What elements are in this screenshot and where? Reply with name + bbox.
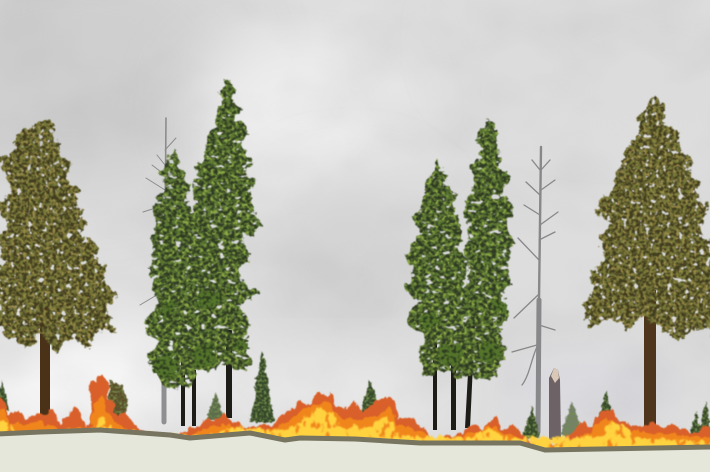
ground surface [0,430,710,472]
tree: left ponderosa pine [0,117,118,420]
tall fir [460,116,514,378]
shrub inside left flames [106,380,128,420]
tall fir [186,82,264,372]
trees: right fir group [406,116,514,430]
bright lower foliage clumps [154,291,248,378]
flames: outer red-orange [0,374,710,452]
trunks [433,300,476,430]
flames [0,374,710,452]
flames: middle orange [0,396,710,452]
tree: right ponderosa pine [584,97,710,429]
trunks [181,330,232,426]
small tree in left flames [206,392,224,420]
small tree left edge [0,380,9,412]
small tree on right [598,390,613,420]
small tree by snag [522,406,540,438]
understory shrub right of snag [560,402,584,436]
trees: left fir group [144,82,264,426]
broken snag [549,368,561,440]
flames: inner yellow [0,408,710,452]
soil band [0,430,710,450]
shorter fir [406,162,476,380]
dead standing tree, right [512,147,558,432]
small tree among flames [358,380,382,420]
small understory trees [0,352,710,438]
dead standing tree, left [140,118,176,422]
pale foreground [0,432,710,472]
small tree at centre-left [249,352,275,422]
small trees far right [698,400,710,436]
bright lower foliage clumps [421,298,508,367]
shorter fir [144,148,204,388]
small tree far right left [689,412,703,436]
